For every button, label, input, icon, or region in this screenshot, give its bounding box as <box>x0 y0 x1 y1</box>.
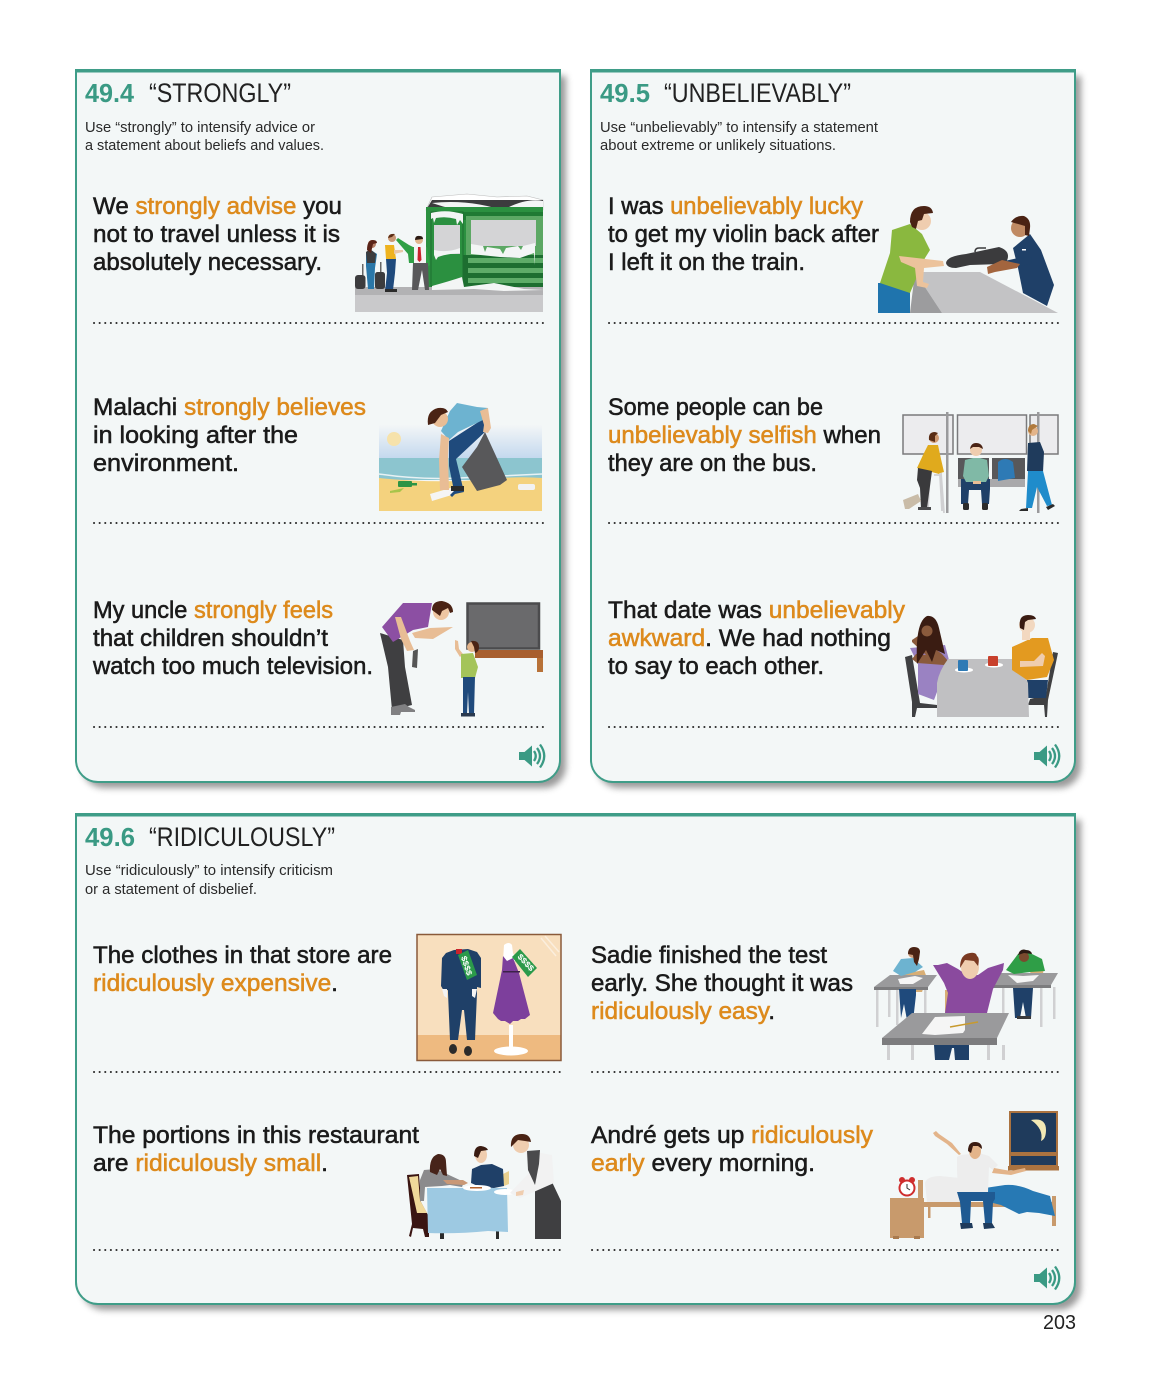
heading: unbelievably: “UNBELIEVABLY” <box>664 78 851 108</box>
sentence: strongly advise: absolutely necessary. <box>93 249 322 276</box>
divider <box>609 522 1059 524</box>
sentence: ridiculously early: André gets up ridiculously <box>591 1122 873 1149</box>
divider <box>94 726 544 728</box>
sentence: ridiculously expensive: The clothes in that store are <box>93 942 392 969</box>
illustration: man waking up at night <box>890 1111 1059 1239</box>
sentence: unbelievably selfish <box>608 394 881 477</box>
sentence: strongly advise <box>93 193 342 276</box>
divider <box>609 322 1059 324</box>
illustration: snowbound train <box>355 194 544 312</box>
illustration: shop window with suit and dress <box>417 934 561 1060</box>
panel: 49.6 ridiculously <box>75 813 1081 1310</box>
illustration: students in exam <box>874 947 1058 1060</box>
sentence: ridiculously expensive <box>93 942 392 997</box>
divider <box>94 322 544 324</box>
sentence: unbelievably lucky: to get my violin back after <box>608 221 879 248</box>
heading: 49.4: 49.4 <box>85 78 135 108</box>
icon: audio speaker <box>519 744 544 768</box>
sentence: strongly feels <box>92 597 373 680</box>
sentence: ridiculously small <box>93 1122 419 1177</box>
sentence: ridiculously easy <box>591 942 853 1025</box>
heading: 49.6: 49.6 <box>85 822 135 852</box>
description: Use “strongly” to intensify advice or <box>85 120 315 136</box>
illustration: awkward date <box>905 615 1058 717</box>
sentence: ridiculously small: The portions in this restaurant <box>93 1122 419 1149</box>
heading: ridiculously: “RIDICULOUSLY” <box>149 822 335 852</box>
description <box>85 120 324 154</box>
description: a statement about beliefs and values. <box>85 138 324 154</box>
panel: 49.4 strongly <box>75 69 566 788</box>
description <box>600 120 878 154</box>
sentence: strongly feels: that children shouldn’t <box>93 625 328 652</box>
divider <box>609 726 1059 728</box>
sentence: unbelievably awkward: That date was unbelievably <box>608 597 905 624</box>
sentence: ridiculously easy: early. She thought it was <box>591 970 853 997</box>
page number: 203 <box>1043 1312 1076 1334</box>
sentence: ridiculously easy: Sadie finished the test <box>591 942 827 969</box>
illustration: shop window with suit and dress: $$$$ <box>516 952 536 973</box>
sentence: strongly believes: environment. <box>93 450 239 477</box>
sentence: unbelievably selfish: Some people can be <box>608 394 823 421</box>
icon: audio speaker <box>1034 1266 1059 1290</box>
illustration: restaurant waiter <box>407 1134 561 1239</box>
sentence: ridiculously small: are ridiculously small. <box>93 1150 328 1177</box>
sentence: ridiculously expensive: ridiculously expensive. <box>93 970 338 997</box>
heading: strongly: “STRONGLY” <box>149 78 291 108</box>
sentence: strongly feels: watch too much television. <box>92 653 373 680</box>
sentence: ridiculously early <box>591 1122 873 1177</box>
illustration: people on the bus <box>903 412 1058 513</box>
divider <box>94 1071 561 1073</box>
heading: 49.5: 49.5 <box>600 78 650 108</box>
divider <box>94 522 544 524</box>
sentence: unbelievably awkward <box>608 597 905 680</box>
sentence: strongly believes: Malachi strongly believes <box>93 394 366 421</box>
sentence: unbelievably lucky: I left it on the train. <box>608 249 805 276</box>
sentence: strongly believes <box>93 394 366 477</box>
sentence: unbelievably lucky <box>608 193 879 276</box>
description: Use “ridiculously” to intensify criticism <box>85 863 333 879</box>
illustration: violin returned at counter <box>878 206 1058 313</box>
sentence: unbelievably selfish: unbelievably selfish when <box>608 422 881 449</box>
sentence: ridiculously early: early every morning. <box>591 1150 815 1177</box>
sentence: strongly advise: not to travel unless it is <box>93 221 340 248</box>
sentence: unbelievably selfish: they are on the bus. <box>608 450 817 477</box>
illustration: shop window with suit and dress: $$$$ <box>459 955 474 977</box>
sentence: unbelievably lucky: I was unbelievably lucky <box>608 193 863 220</box>
sentence: strongly feels: My uncle strongly feels <box>93 597 333 624</box>
sentence: unbelievably awkward: to say to each other. <box>608 653 824 680</box>
description: about extreme or unlikely situations. <box>600 138 836 154</box>
panel: 49.5 unbelievably <box>590 69 1081 788</box>
divider <box>592 1071 1059 1073</box>
description: Use “unbelievably” to intensify a statement <box>600 120 878 136</box>
sentence: unbelievably awkward: awkward. We had nothing <box>608 625 891 652</box>
description: or a statement of disbelief. <box>85 882 257 898</box>
icon: audio speaker <box>1034 744 1059 768</box>
divider <box>94 1249 561 1251</box>
illustration: uncle scolding child, television <box>380 601 543 716</box>
sentence: ridiculously easy: ridiculously easy. <box>591 998 775 1025</box>
description <box>85 863 333 898</box>
divider <box>592 1249 1059 1251</box>
sentence: strongly advise: We strongly advise you <box>93 193 342 220</box>
sentence: strongly believes: in looking after the <box>93 422 298 449</box>
illustration: beach clean-up <box>379 403 542 511</box>
